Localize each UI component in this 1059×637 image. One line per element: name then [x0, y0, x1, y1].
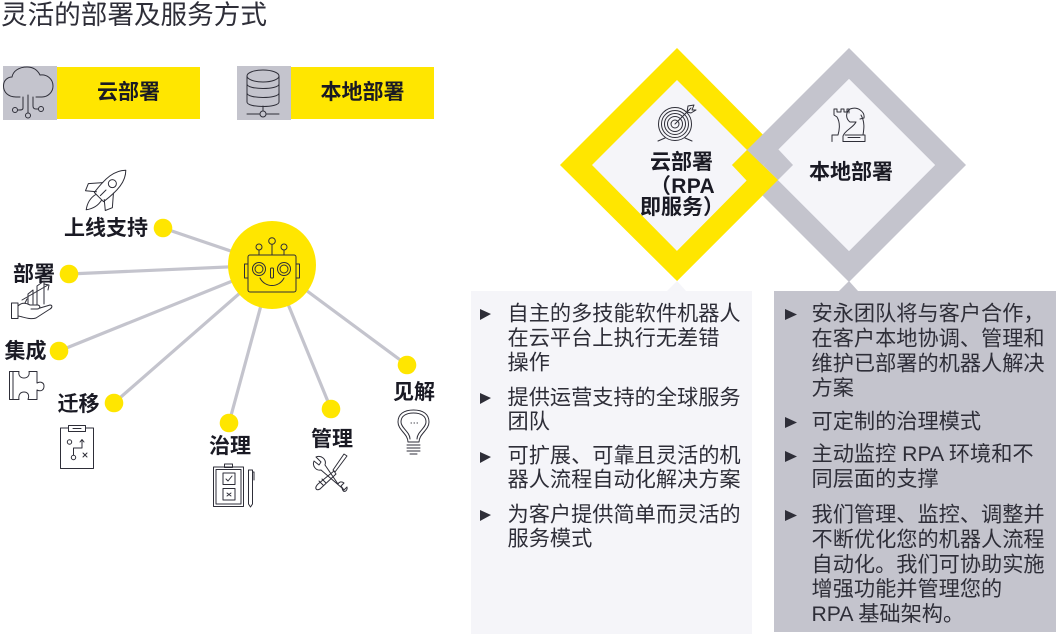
cloud deployment badge: [3, 66, 200, 120]
panel: on-premise deployment details: [774, 291, 1056, 632]
bullet: managing and optimising: 我们管理、监控、调整并: [812, 502, 1045, 526]
bullet: scalable solution: 可扩展、可靠且灵活的机: [508, 444, 741, 468]
bullet: simple service model: [480, 502, 741, 550]
node: go-live support: 上线支持: [64, 217, 148, 240]
bullet: scalable solution: [480, 444, 741, 492]
bullet: global support team: 提供运营支持的全球服务: [508, 386, 741, 410]
icon: chess pieces: [832, 108, 865, 142]
node: management: [311, 400, 353, 491]
icon: wrench and screwdriver: [313, 454, 347, 491]
bullet: EY team collaboration: 安永团队将与客户合作，: [812, 302, 1045, 326]
node: insights: 见解: [393, 381, 435, 404]
interlock: yellow over grey: [677, 150, 778, 281]
on-premise deployment badge: [237, 66, 434, 120]
bullet: EY team collaboration: [785, 302, 1045, 400]
label: cloud deployment: 云部署: [97, 81, 160, 104]
diamond emblem: [560, 48, 966, 291]
node: go-live support: [64, 158, 172, 240]
icon: checklist and pen: [214, 464, 254, 507]
icon: hand with chart: [12, 281, 52, 319]
bullet: autonomous robots: 自主的多技能软件机器人: [508, 302, 741, 326]
title: 灵活的部署及服务方式: [1, 0, 267, 30]
bullet: managing and optimising: [785, 502, 1045, 626]
bullet: EY team collaboration: 在客户本地协调、管理和: [812, 326, 1045, 350]
bullet: autonomous robots: 操作: [508, 350, 550, 374]
hub: robot: [228, 221, 316, 309]
node: deployment: [12, 263, 78, 319]
bullet: EY team collaboration: 方案: [812, 376, 854, 400]
icon: puzzle piece: [10, 372, 44, 400]
icon: database: [247, 70, 279, 117]
bullet: governance model: 可定制的治理模式: [812, 410, 981, 434]
bullet: autonomous robots: 在云平台上执行无差错: [508, 326, 719, 350]
interlock: grey over yellow tip: [763, 149, 793, 180]
node: integration: 集成: [4, 339, 46, 363]
label: on-premise: 本地部署: [809, 161, 893, 184]
icon: clipboard with plan: [60, 426, 94, 468]
bullet: simple service model: 为客户提供简单而灵活的: [508, 502, 741, 526]
node: governance: 治理: [209, 435, 251, 458]
bullet: global support team: [480, 386, 741, 434]
label: cloud (RPA as a service): （RPA: [650, 175, 715, 198]
bullet: EY team collaboration: 维护已部署的机器人解决: [812, 352, 1045, 376]
diamond: on-premise, grey ring: [732, 48, 966, 282]
bullet: managing and optimising: 不断优化您的机器人流程: [812, 528, 1045, 552]
node: deployment: 部署: [13, 263, 55, 286]
node: migration: 迁移: [58, 393, 100, 416]
bullet: global support team: 团队: [508, 410, 550, 434]
node: migration: [58, 393, 123, 468]
icon: light bulb: [398, 410, 429, 454]
bullet: simple service model: 服务模式: [508, 526, 592, 550]
node: management: 管理: [311, 428, 353, 451]
label: cloud (RPA as a service): 云部署: [650, 151, 713, 174]
connector stem to cloud panel: [667, 281, 686, 291]
label: on-premise deployment: 本地部署: [320, 81, 404, 104]
label: cloud (RPA as a service): [640, 151, 724, 219]
bullet: active monitoring: 同层面的支撑: [812, 467, 939, 491]
bullet: managing and optimising: RPA 基础架构。: [812, 602, 964, 626]
icon: cloud: [4, 67, 53, 118]
bullet: active monitoring: 主动监控 RPA 环境和不: [812, 442, 1034, 466]
label: cloud (RPA as a service): 即服务）: [640, 196, 724, 219]
bullet: managing and optimising: 自动化。我们可协助实施: [812, 552, 1045, 576]
spokes: [59, 228, 407, 423]
bullet: scalable solution: 器人流程自动化解决方案: [508, 468, 741, 492]
bullet: managing and optimising: 增强功能并管理您的: [812, 577, 1002, 601]
node: insights: [393, 356, 435, 454]
node: integration: [4, 339, 68, 400]
bullet: autonomous robots: [480, 302, 741, 374]
icon: target: [658, 105, 696, 141]
connector stem to on-premise panel: [839, 281, 858, 291]
hub and spoke diagram: [4, 158, 435, 507]
node: governance: [209, 414, 254, 507]
bullet: active monitoring: [785, 442, 1034, 491]
panel: cloud deployment details: [471, 291, 752, 634]
icon: rocket: [74, 158, 138, 222]
diamond: cloud, yellow ring: [560, 48, 793, 281]
